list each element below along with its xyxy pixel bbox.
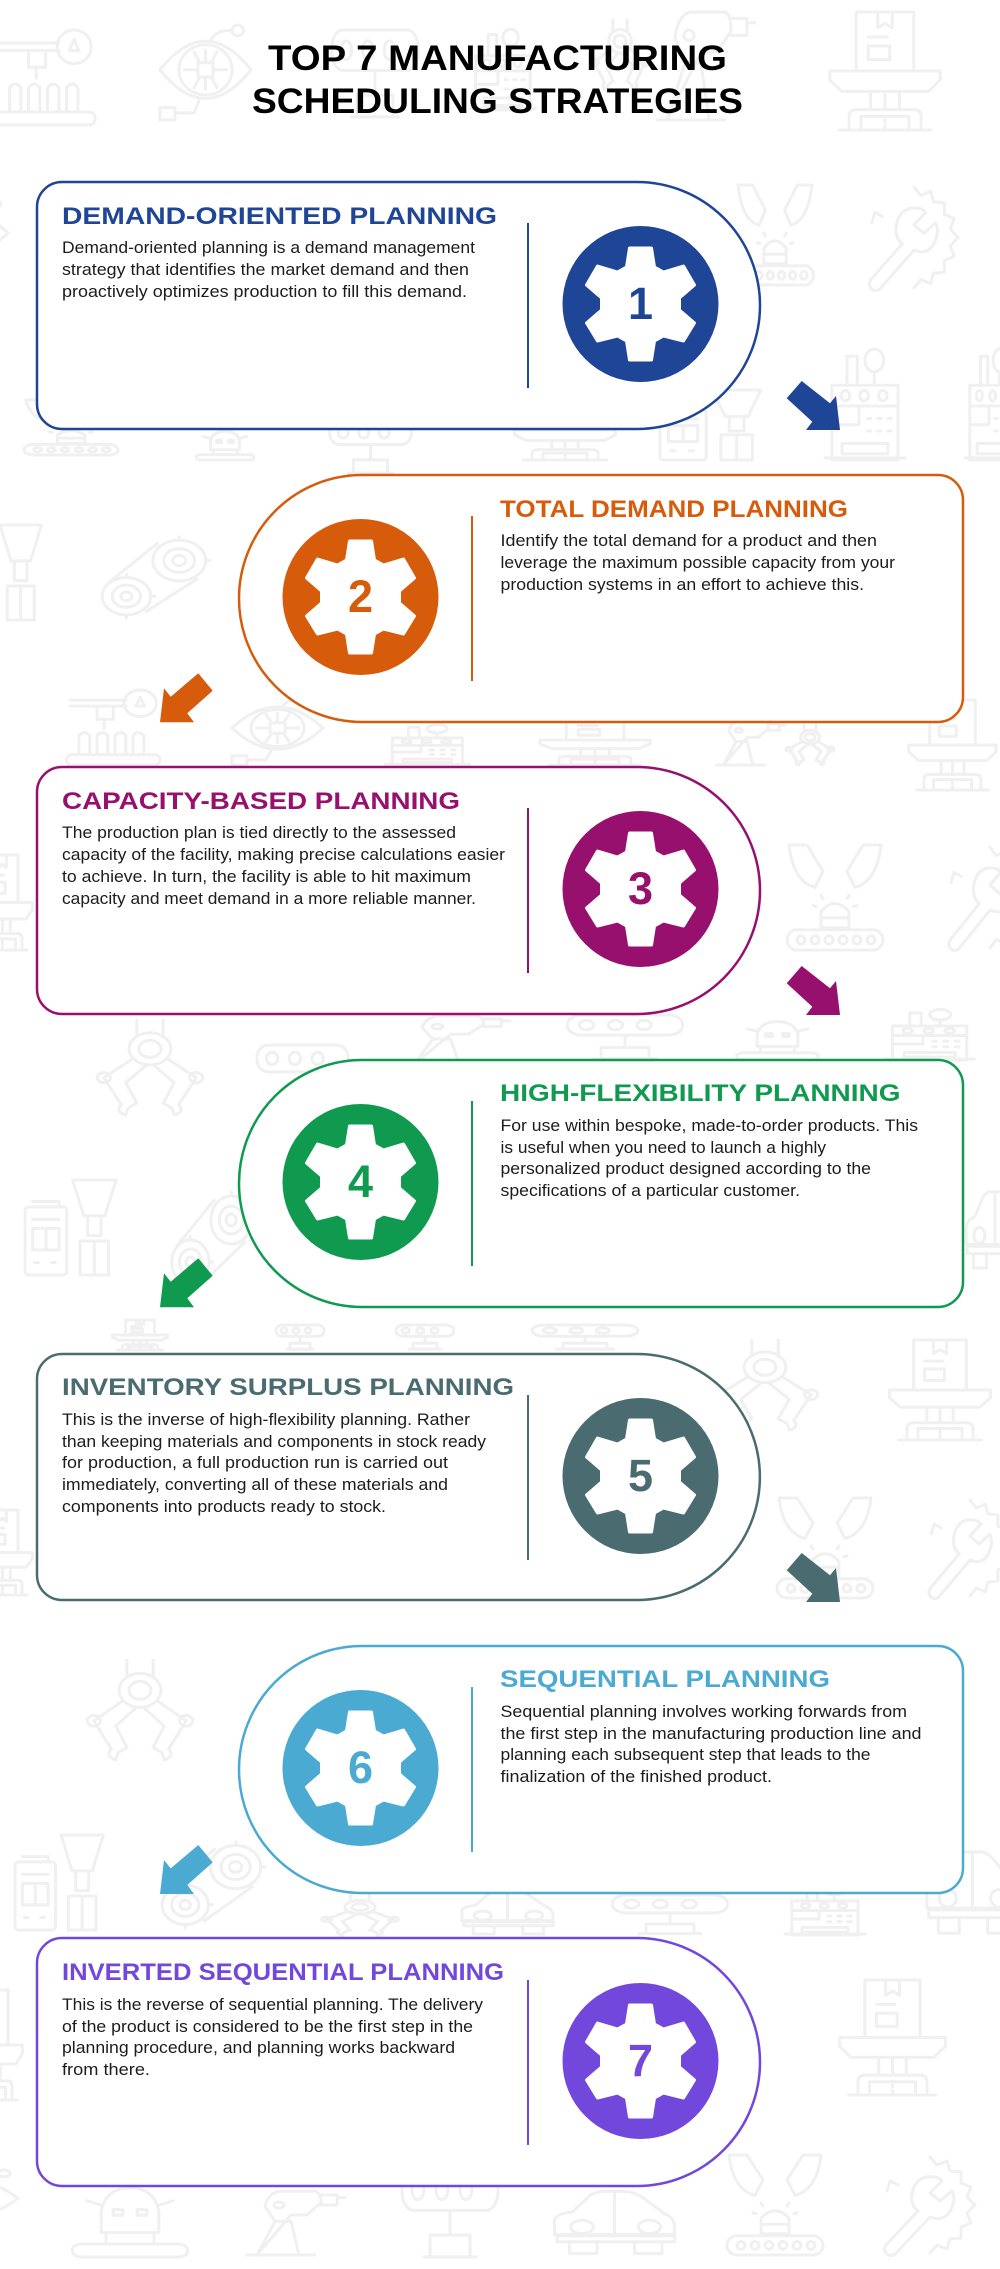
- text block: [62, 238, 475, 301]
- text block: Demand-oriented planning is a demand management: [62, 238, 475, 257]
- text block: [62, 1410, 487, 1516]
- icon: gear 3: 3: [628, 863, 653, 914]
- arrow 5: [787, 1553, 840, 1602]
- icon: gear 7: 7: [628, 2035, 653, 2086]
- text block: than keeping materials and components in stock ready: [62, 1432, 487, 1451]
- panel: high-flexibility planning: [239, 1060, 963, 1307]
- text block: specifications of a particular customer.: [500, 1181, 800, 1200]
- text block: personalized product designed according to the: [500, 1159, 871, 1178]
- text block: This is the inverse of high-flexibility planning. Rather: [62, 1410, 470, 1429]
- title: SCHEDULING STRATEGIES: [252, 82, 743, 121]
- text block: capacity and meet demand in a more reliable manner.: [62, 889, 476, 908]
- icon: gear 1: [562, 226, 718, 382]
- icon: gear 2: [282, 519, 438, 675]
- icon: gear 3: [562, 811, 718, 967]
- text block: to achieve. In turn, the facility is able to hit maximum: [62, 867, 471, 886]
- text block: The production plan is tied directly to the assessed: [62, 823, 456, 842]
- icon: gear 5: 5: [628, 1450, 653, 1501]
- heading: INVERTED SEQUENTIAL PLANNING: [62, 1959, 504, 1986]
- arrow 2: [160, 673, 213, 722]
- text block: the first step in the manufacturing production line and: [500, 1724, 922, 1743]
- icon: gear 2: 2: [348, 571, 373, 622]
- icon: gear 6: [282, 1690, 438, 1846]
- heading: SEQUENTIAL PLANNING: [500, 1666, 830, 1693]
- text block: Sequential planning involves working forwards from: [500, 1702, 907, 1721]
- icon: gear 4: [282, 1104, 438, 1260]
- icon: gear 4: 4: [348, 1156, 373, 1207]
- heading: DEMAND-ORIENTED PLANNING: [62, 203, 497, 230]
- panel: capacity-based planning: [37, 767, 760, 1014]
- arrow 3: [787, 966, 840, 1015]
- text block: for production, a full production run is carried out: [62, 1453, 448, 1472]
- text block: [62, 823, 505, 908]
- icon: gear 5: [562, 1398, 718, 1554]
- text block: Identify the total demand for a product and then: [500, 531, 877, 550]
- arrow 6: [160, 1845, 213, 1894]
- text block: This is the reverse of sequential planning. The delivery: [62, 1995, 484, 2014]
- arrow 4: [160, 1258, 213, 1307]
- text block: planning procedure, and planning works backward: [62, 2038, 455, 2057]
- text block: is useful when you need to launch a highly: [500, 1138, 826, 1157]
- panel: inventory surplus planning: [37, 1354, 760, 1600]
- text block: finalization of the finished product.: [500, 1767, 772, 1786]
- panel: demand-oriented planning: [37, 182, 760, 429]
- icon: gear 7: [562, 1983, 718, 2139]
- title: TOP 7 MANUFACTURING: [268, 39, 727, 78]
- arrow 1: [787, 381, 840, 430]
- heading: HIGH-FLEXIBILITY PLANNING: [500, 1080, 900, 1107]
- text block: immediately, converting all of these materials and: [62, 1475, 448, 1494]
- text block: [500, 1702, 922, 1786]
- text block: leverage the maximum possible capacity from your: [500, 553, 895, 572]
- panel: sequential planning: [239, 1646, 963, 1893]
- text block: [500, 1116, 918, 1200]
- text block: planning each subsequent step that leads to the: [500, 1745, 870, 1764]
- text block: production systems in an effort to achieve this.: [500, 575, 864, 594]
- text block: [500, 531, 895, 594]
- text block: capacity of the facility, making precise calculations easier: [62, 845, 505, 864]
- panel: total demand planning: [239, 475, 963, 722]
- heading: INVENTORY SURPLUS PLANNING: [62, 1374, 514, 1401]
- text block: proactively optimizes production to fill this demand.: [62, 282, 467, 301]
- text block: components into products ready to stock.: [62, 1497, 386, 1516]
- panel: inverted sequential planning: [37, 1938, 760, 2186]
- text block: [62, 1995, 484, 2079]
- icon: gear 6: 6: [348, 1742, 373, 1793]
- text block: from there.: [62, 2060, 150, 2079]
- heading: TOTAL DEMAND PLANNING: [500, 496, 848, 523]
- icon: gear 1: 1: [628, 278, 653, 329]
- text block: For use within bespoke, made-to-order products. This: [500, 1116, 918, 1135]
- text block: of the product is considered to be the first step in the: [62, 2017, 473, 2036]
- text block: strategy that identifies the market demand and then: [62, 260, 469, 279]
- title: [252, 39, 743, 121]
- heading: CAPACITY-BASED PLANNING: [62, 788, 460, 815]
